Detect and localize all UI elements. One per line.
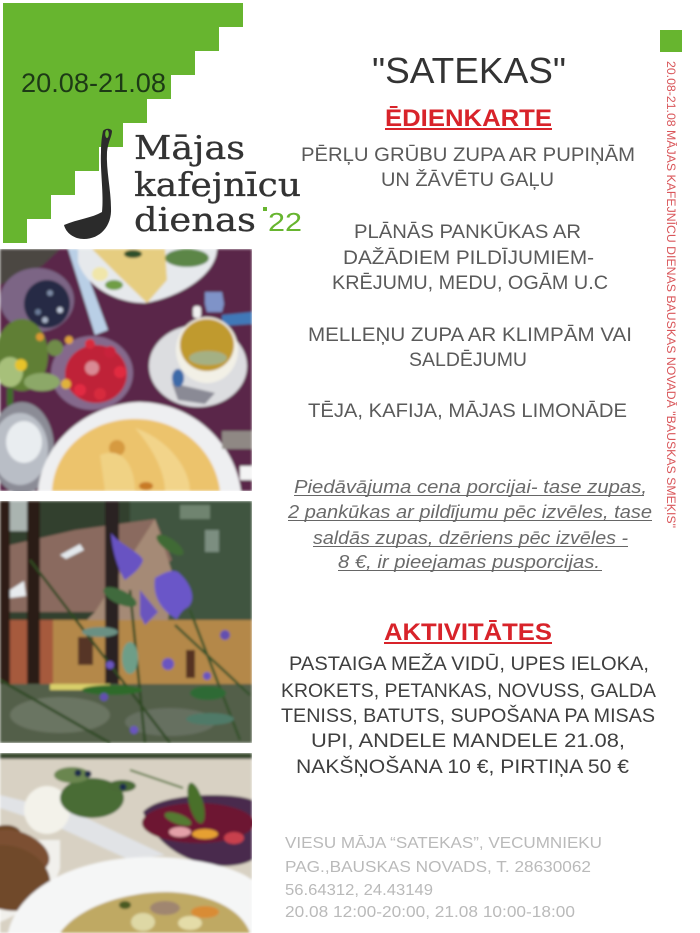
price note: Piedāvājuma cena porcijai- tase zupas, [294, 477, 647, 497]
tree trunks [0, 501, 119, 691]
menu item: blueberry soup: SALDĒJUMU [409, 350, 527, 371]
activities list: KROKETS, PETANKAS, NOVUSS, GALDA [281, 681, 656, 702]
house [5, 519, 252, 684]
price note: saldās zupas, dzēriens pēc izvēles - [313, 528, 628, 548]
bread slices [0, 821, 60, 922]
photo: guest house with bellflowers [0, 501, 252, 743]
white rose [24, 786, 70, 834]
photo: soup, bread and berry dessert [0, 753, 254, 933]
sour cream bowl [0, 402, 54, 494]
menu item: blueberry soup [308, 325, 632, 371]
green staircase shape [3, 3, 243, 243]
blueberry sprig [54, 767, 183, 818]
logo wordmark: Mājas [134, 128, 245, 167]
price note [287, 477, 652, 572]
menu item: drinks: TĒJA, KAFIJA, MĀJAS LIMONĀDE [308, 401, 627, 422]
green square accent [660, 30, 682, 52]
menu item: pancakes: PLĀNĀS PANKŪKAS AR [354, 222, 581, 243]
top plate [78, 249, 217, 303]
menu item: pancakes: DAŽĀDIEM PILDĪJUMIEM- [343, 247, 594, 269]
price note: 2 pankūkas ar pildījumu pēc izvēles, tase [287, 502, 652, 522]
date heading: 20.08-21.08 [21, 68, 166, 98]
contact details: VIESU MĀJA “SATEKAS”, VECUMNIEKU [285, 834, 602, 852]
menu item: barley soup: PĒRĻU GRŪBU ZUPA AR PUPIŅĀM [301, 145, 635, 166]
price note: 8 €, ir pieejamas pusporcijas. [338, 552, 600, 572]
contact details: PAG.,BAUSKAS NOVADS, T. 28630062 [285, 859, 591, 876]
raspberry bowl [51, 336, 133, 410]
menu item: blueberry soup: MELLEŅU ZUPA AR KLIMPĀM VAI [308, 325, 632, 346]
activities list [281, 653, 656, 778]
tea cup and saucer [149, 306, 247, 407]
activities list: UPI, ANDELE MANDELE 21.08, [311, 731, 625, 752]
photo: food table with pancakes and tea [0, 249, 252, 494]
menu item: pancakes: KRĒJUMU, MEDU, OGĀM U.C [332, 273, 608, 294]
contact details [285, 834, 602, 921]
blueberry bowl [0, 268, 74, 332]
logo wordmark: dienas [134, 200, 256, 239]
bellflowers and leaves [82, 531, 234, 734]
fork [205, 292, 224, 312]
title: "SATEKAS" [372, 50, 566, 91]
menu item: barley soup: UN ŽĀVĒTU GAĻU [381, 169, 554, 191]
heading: menu: ĒDIENKARTE [385, 105, 552, 132]
icon: ladle [64, 129, 112, 239]
dessert forks [222, 431, 252, 480]
activities list: PASTAIGA MEŽA VIDŪ, UPES IELOKA, [289, 653, 649, 675]
meadow [0, 560, 252, 743]
activities list: NAKŠŅOŠANA 10 €, PIRTIŅA 50 € [296, 756, 629, 778]
vertical side text: 20.08-21.08 MĀJAS KAFEJNĪCU DIENAS BAUSKAS NOVADĀ "BAUSKAS SMEĶIS" [664, 61, 678, 528]
wildflowers [0, 319, 73, 406]
logo wordmark: kafejnīcu [134, 165, 301, 204]
menu item: pancakes [332, 222, 608, 294]
contact details: 56.64312, 24.43149 [285, 882, 433, 899]
soup bowl [8, 857, 252, 933]
logo wordmark: 22 [268, 207, 302, 237]
logo wordmark [134, 128, 302, 239]
heading: activities: AKTIVITĀTES [384, 619, 552, 646]
contact details: 20.08 12:00-20:00, 21.08 10:00-18:00 [285, 904, 575, 921]
activities list: TENISS, BATUTS, SUPOŠANA PA MISAS [281, 705, 655, 727]
pancake plate [38, 402, 241, 491]
berry soup bowl [142, 781, 254, 866]
menu item: barley soup [301, 145, 635, 191]
